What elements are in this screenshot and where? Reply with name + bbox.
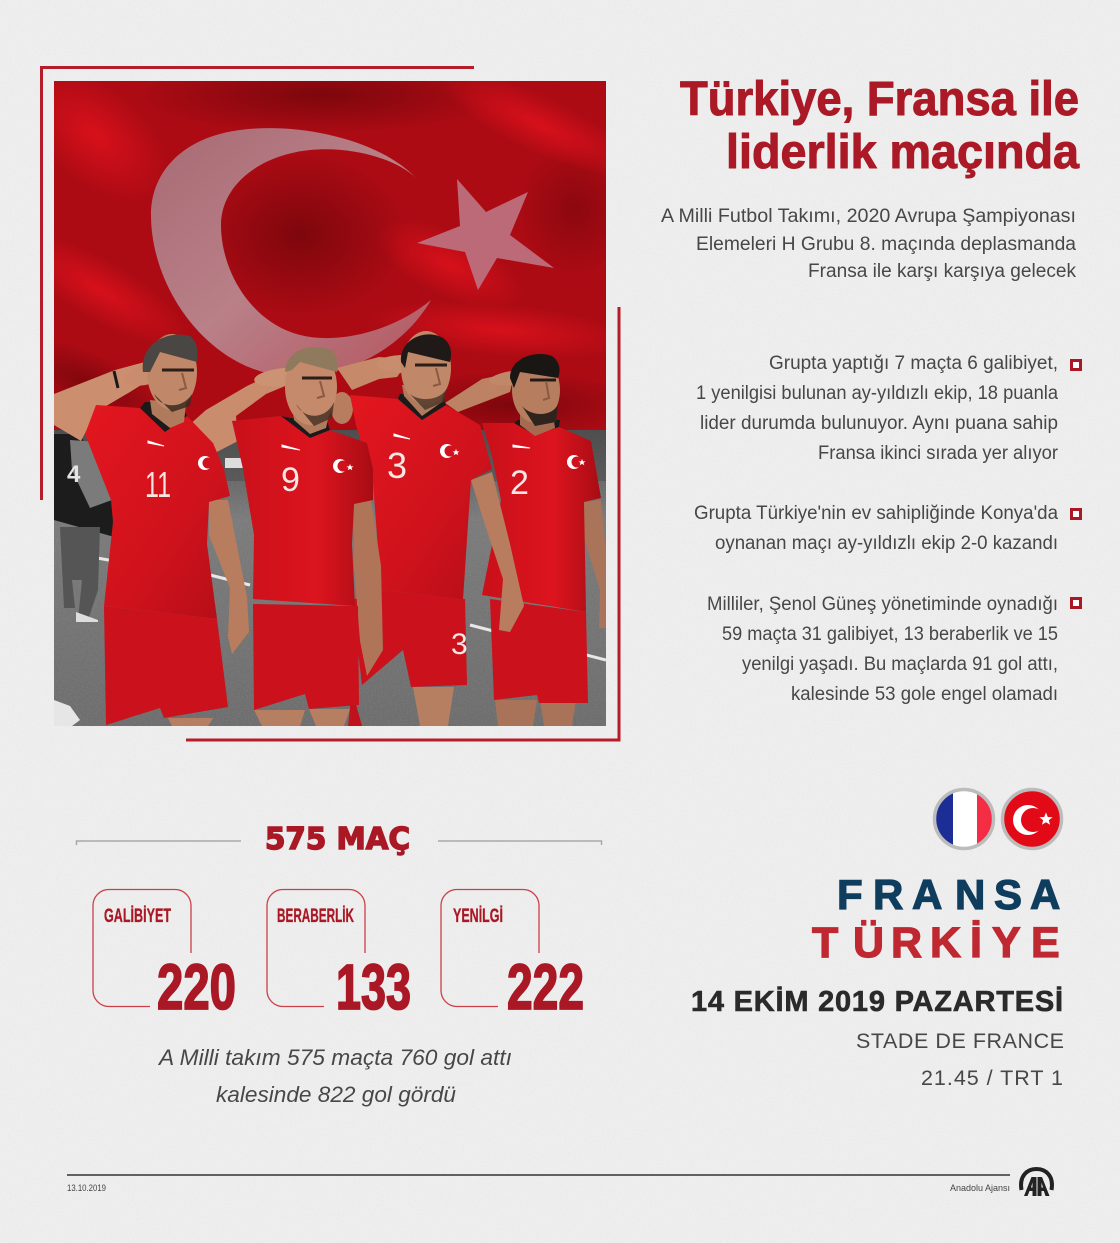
- bullet marker 2: [1072, 510, 1080, 518]
- icon: France flag: [934, 790, 996, 848]
- heading rule lines: [76, 841, 602, 845]
- player 9 (number 9): [179, 347, 383, 726]
- stat: galibiyet 220: 220: [157, 951, 236, 1023]
- player 9 (number 9): 9: [281, 461, 300, 499]
- bullet text 2: Grupta Türkiye'nin ev sahipliğinde Konya'da: [694, 503, 1058, 524]
- stat: yenilgi 222: [441, 890, 584, 1023]
- pitch background: [54, 430, 606, 726]
- intro text: [661, 206, 1076, 282]
- team name: Fransa: FRANSA: [837, 871, 1060, 918]
- goals caption: kalesinde 822 gol gördü: [216, 1082, 456, 1107]
- bullet text 1: lider durumda bulunuyor. Aynı puana sahip: [700, 413, 1058, 434]
- flag background with folds: [54, 81, 606, 430]
- stat: beraberlik 133: 133: [336, 951, 411, 1023]
- heading: 575 MAÇ: 575 MAÇ: [265, 822, 410, 857]
- background figure: 4: [67, 461, 81, 488]
- title: [680, 73, 1079, 179]
- intro text: Fransa ile karşı karşıya gelecek: [808, 261, 1076, 282]
- match time and channel: 21.45 / TRT 1: [921, 1066, 1063, 1090]
- intro text: A Milli Futbol Takımı, 2020 Avrupa Şampiyonası: [661, 206, 1076, 227]
- icon: Anadolu Agency logo: [1021, 1169, 1052, 1196]
- match date: 14 EKİM 2019 PAZARTESİ: [691, 986, 1063, 1018]
- player 3 (number 3): [331, 331, 524, 726]
- player 3 (number 3): 3: [387, 445, 407, 486]
- player 2 (number 2): 2: [510, 464, 529, 502]
- bullet text 1: [696, 353, 1059, 464]
- bullet text 1: Fransa ikinci sırada yer alıyor: [818, 443, 1059, 464]
- flag crescent: [151, 128, 431, 376]
- goals caption: [157, 1045, 512, 1107]
- footer line: [67, 1174, 1010, 1176]
- stat: galibiyet 220: GALİBİYET: [104, 906, 171, 927]
- title: liderlik maçında: [726, 126, 1079, 179]
- match venue: STADE DE FRANCE: [856, 1029, 1064, 1053]
- title: Türkiye, Fransa ile: [680, 73, 1079, 126]
- player 2 (number 2): [445, 354, 606, 726]
- red frame: top-left corner: [42, 68, 474, 500]
- bullet marker 1: [1072, 360, 1080, 370]
- player 11 (number 11): 11: [145, 464, 171, 505]
- stat: beraberlik 133: BERABERLİK: [277, 906, 354, 927]
- bullet text 1: 1 yenilgisi bulunan ay-yıldızlı ekip, 18 puanla: [696, 383, 1058, 404]
- intro text: Elemeleri H Grubu 8. maçında deplasmanda: [696, 234, 1076, 255]
- icon: Turkey flag: [1002, 790, 1062, 848]
- bullet text 3: kalesinde 53 gole engel olamadı: [791, 684, 1058, 705]
- bullet text 2: oynanan maçı ay-yıldızlı ekip 2-0 kazandı: [715, 533, 1058, 554]
- bullet text 3: [707, 594, 1058, 705]
- stat: yenilgi 222: 222: [507, 951, 584, 1023]
- player 3 (number 3): 3: [451, 628, 468, 661]
- flag star: [417, 179, 554, 290]
- red frame: bottom-right corner: [186, 307, 619, 740]
- bullet text 2: [694, 503, 1058, 554]
- stat: beraberlik 133: [267, 890, 411, 1023]
- photo: Turkish flag and four saluting players: [54, 81, 606, 726]
- stat: galibiyet 220: [93, 890, 236, 1023]
- footer date: 13.10.2019: [67, 1183, 106, 1193]
- bullet text 3: 59 maçta 31 galibiyet, 13 beraberlik ve 15: [722, 624, 1058, 645]
- bullet text 3: Milliler, Şenol Güneş yönetiminde oynadığı: [707, 594, 1058, 615]
- footer credit: Anadolu Ajansı: [950, 1183, 1010, 1194]
- stat: yenilgi 222: YENİLGİ: [453, 906, 503, 927]
- bullet marker 3: [1072, 598, 1080, 608]
- bullet text 3: yenilgi yaşadı. Bu maçlarda 91 gol attı,: [742, 654, 1058, 675]
- team name: Türkiye: TÜRKİYE: [812, 919, 1060, 967]
- bullet text 1: Grupta yaptığı 7 maçta 6 galibiyet,: [769, 353, 1058, 374]
- background figure: [54, 434, 113, 726]
- goals caption: A Milli takım 575 maçta 760 gol attı: [157, 1045, 512, 1070]
- player 11 (number 11): [54, 334, 249, 726]
